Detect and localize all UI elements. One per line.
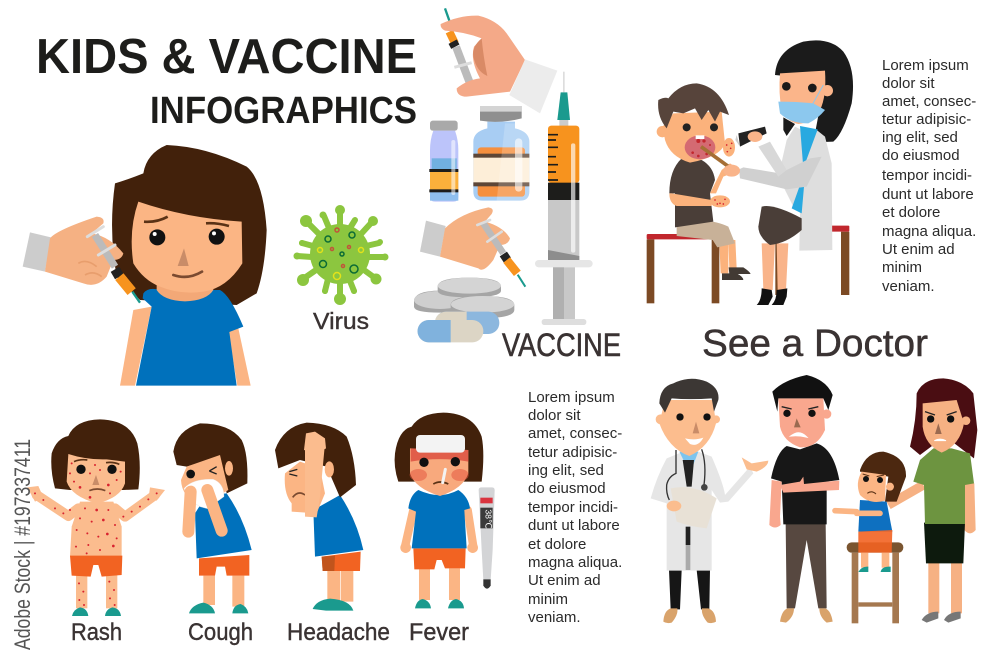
text block: symptoms paragraph: tetur adipisic- (528, 444, 617, 461)
panel: girl receiving injection (23, 145, 267, 386)
text block: symptoms paragraph: et dolore (528, 536, 586, 553)
icon: virus (294, 205, 388, 305)
panel: family with doctor (651, 375, 977, 623)
text block: doctor paragraph: ing elit, sed (882, 129, 958, 146)
text block: doctor paragraph: do eiusmod (882, 147, 960, 164)
labels: symptoms: Fever (409, 619, 469, 646)
child on stool (835, 452, 923, 623)
figure: fever with thermometer: 38℃ (483, 509, 493, 529)
text block: doctor paragraph (882, 57, 976, 295)
icon: small vial (429, 121, 458, 202)
text block: doctor paragraph: minim (882, 259, 922, 276)
father (769, 375, 839, 623)
text block: symptoms paragraph: Ut enim ad (528, 572, 601, 589)
mother (910, 378, 977, 623)
text block: symptoms paragraph: do eiusmod (528, 480, 606, 497)
text block: doctor paragraph: dunt ut labore (882, 186, 974, 203)
icon: hand with small syringe (420, 207, 525, 287)
bench (647, 226, 849, 303)
labels: symptoms (71, 619, 469, 646)
text block: doctor paragraph: tempor incidi- (882, 167, 972, 184)
text block: doctor paragraph: magna aliqua. (882, 223, 976, 240)
woman doctor (723, 40, 853, 305)
text block: symptoms paragraph: magna aliqua. (528, 554, 622, 571)
text block: doctor paragraph: veniam. (882, 278, 935, 295)
text block: symptoms paragraph: ing elit, sed (528, 462, 604, 479)
figure: fever with thermometer (395, 413, 495, 608)
title (36, 30, 417, 132)
text block: symptoms paragraph: dolor sit (528, 407, 581, 424)
icon: pills and capsules (414, 278, 514, 342)
icon: top hand holding syringe (441, 8, 557, 113)
label: virus: Virus (313, 308, 369, 334)
text block: symptoms paragraph: veniam. (528, 609, 581, 626)
figure: cough (173, 423, 252, 613)
figure: rash (27, 419, 165, 616)
icon: gloved hand with syringe (23, 217, 140, 303)
text block: symptoms paragraph (528, 389, 622, 626)
labels: symptoms: Cough (188, 619, 253, 646)
text block: doctor paragraph: tetur adipisic- (882, 111, 971, 128)
title: INFOGRAPHICS (150, 90, 417, 132)
labels: symptoms: Rash (71, 619, 122, 646)
text block: doctor paragraph: et dolore (882, 204, 940, 221)
boy patient (657, 83, 751, 280)
text block: symptoms paragraph: Lorem ipsum (528, 389, 615, 406)
watermark credit: adobe stock: Adobe Stock | #197337411 (10, 439, 35, 650)
panel: symptoms (27, 413, 495, 616)
doctor (651, 379, 768, 623)
text block: doctor paragraph: Lorem ipsum (882, 57, 969, 74)
text block: doctor paragraph: amet, consec- (882, 93, 976, 110)
heading: see a doctor: See a Doctor (702, 323, 928, 365)
figure: headache (275, 423, 363, 611)
text block: symptoms paragraph: dunt ut labore (528, 517, 620, 534)
text block: symptoms paragraph: tempor incidi- (528, 499, 618, 516)
icon: large vial (473, 106, 529, 201)
panel: vaccine supplies (414, 8, 593, 342)
text block: symptoms paragraph: amet, consec- (528, 425, 622, 442)
labels: symptoms: Headache (287, 619, 390, 646)
text block: doctor paragraph: dolor sit (882, 75, 935, 92)
label: vaccine: VACCINE (502, 327, 621, 363)
text block: symptoms paragraph: minim (528, 591, 568, 608)
panel: doctor examining boy (647, 40, 853, 305)
text block: doctor paragraph: Ut enim ad (882, 241, 955, 258)
title: KIDS & VACCINE (36, 30, 417, 84)
icon: large syringe (535, 72, 593, 325)
